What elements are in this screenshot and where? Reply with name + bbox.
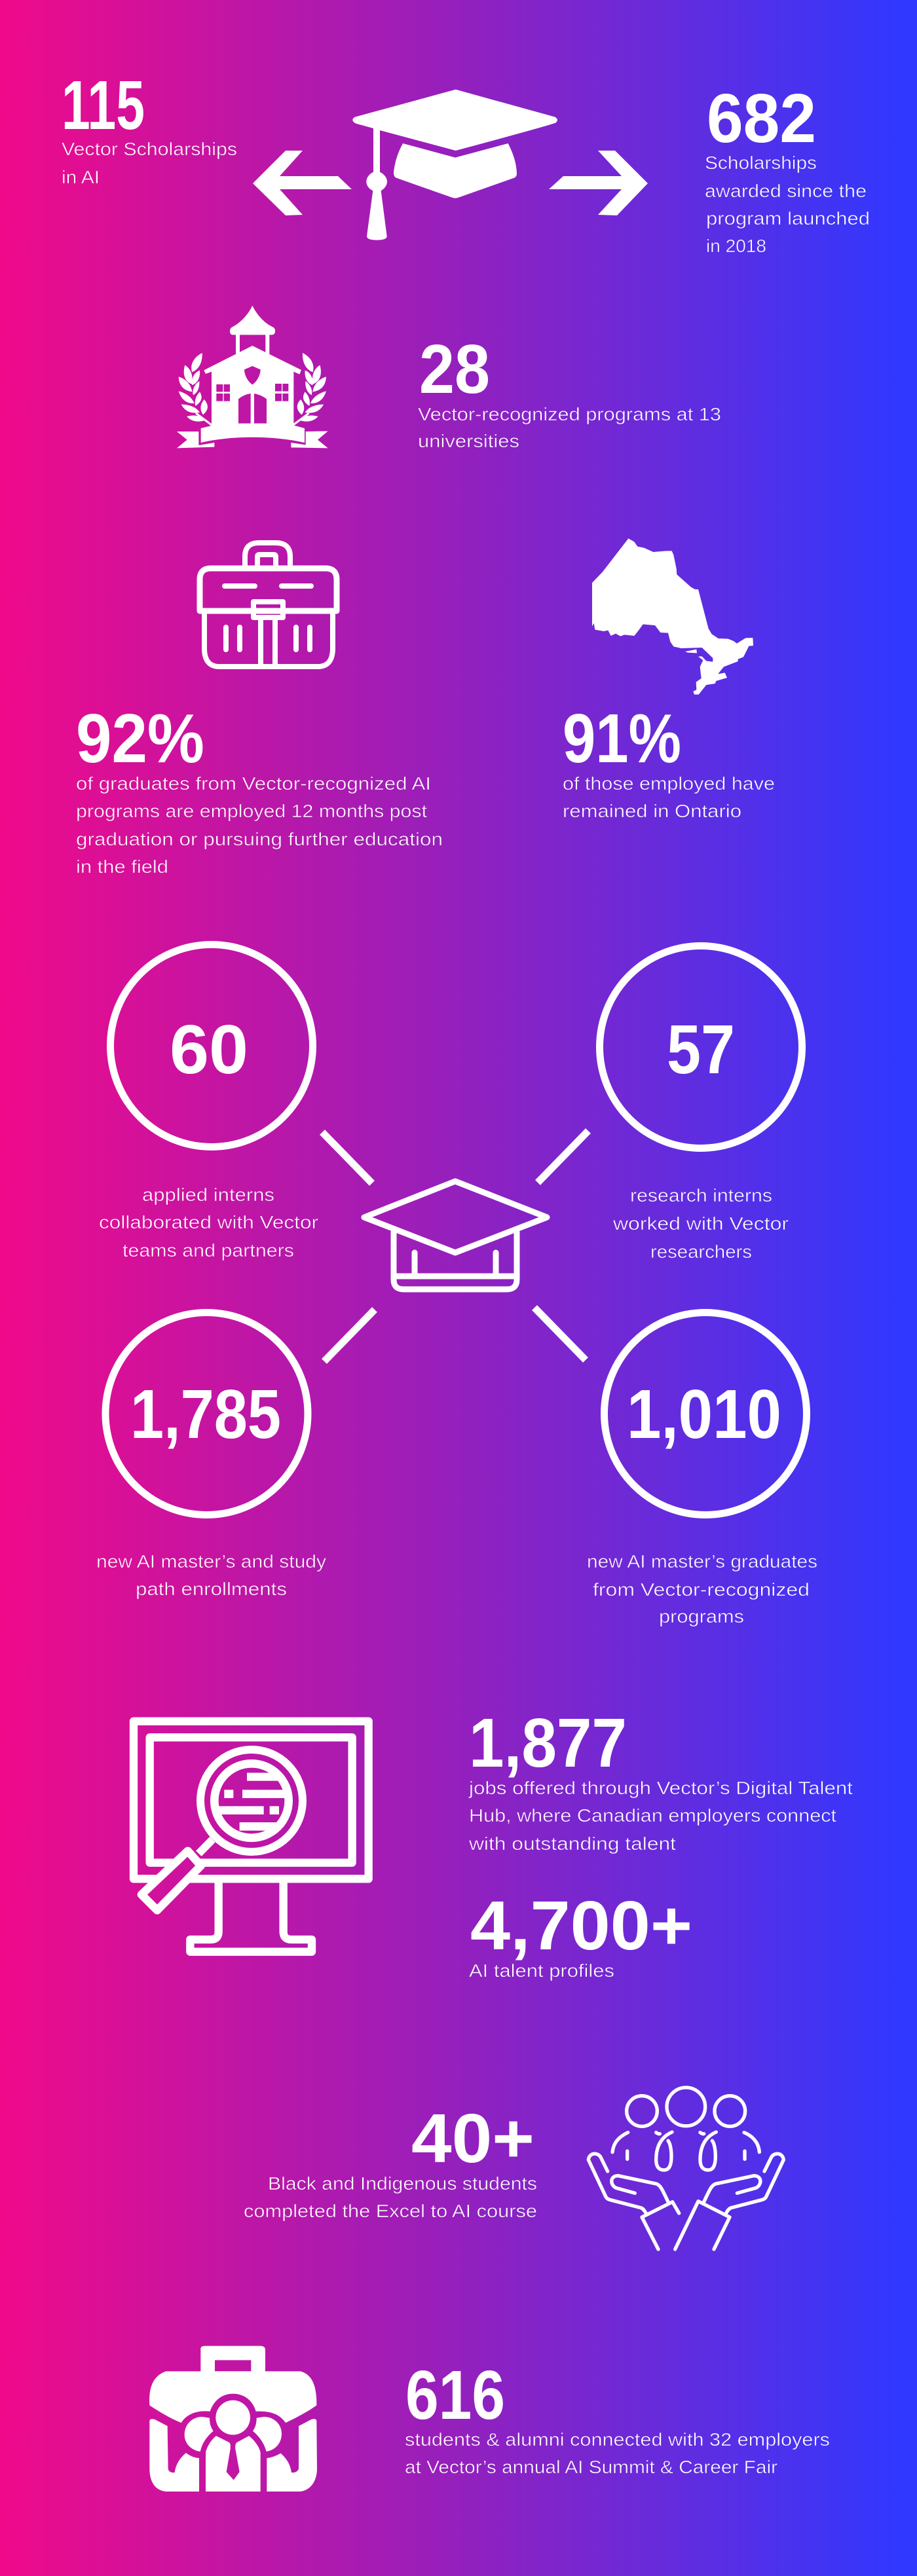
description: graduation or pursuing further education xyxy=(76,829,443,849)
description: programs are employed 12 months post xyxy=(76,801,427,821)
icon: hands holding people xyxy=(588,2088,783,2249)
caption: research interns: worked with Vector xyxy=(612,1213,789,1234)
description xyxy=(468,1778,853,1854)
number: 91% xyxy=(563,700,681,777)
clasp xyxy=(253,602,283,617)
description: Black and Indigenous students xyxy=(268,2173,537,2194)
icon: graduation cap with arrows xyxy=(253,90,648,240)
circle stat: 57: 57 xyxy=(667,1011,735,1088)
details xyxy=(225,586,311,650)
description: program launched xyxy=(706,208,870,229)
stat: 92% employed xyxy=(76,700,443,877)
bag top xyxy=(149,2371,316,2423)
data lines in lens xyxy=(219,1773,284,1831)
caption: research interns xyxy=(612,1185,789,1262)
stat: 40+ students xyxy=(244,2100,537,2221)
description xyxy=(244,2173,537,2221)
bodies xyxy=(612,2132,759,2170)
stat: 115 scholarships xyxy=(62,67,237,187)
stat: 91% remained in Ontario xyxy=(563,700,775,821)
description: Vector-recognized programs at 13 xyxy=(418,404,721,424)
case body xyxy=(204,611,333,667)
description: with outstanding talent xyxy=(468,1833,676,1854)
number: 92% xyxy=(76,700,204,777)
monitor frame xyxy=(134,1721,369,1879)
panel: interns and graduates xyxy=(96,944,817,1627)
number: 115 xyxy=(62,67,145,144)
description xyxy=(405,2429,830,2477)
description: remained in Ontario xyxy=(563,801,741,821)
right arrow xyxy=(549,151,648,215)
lens xyxy=(200,1750,303,1852)
circle stat: 1,785 xyxy=(105,1312,308,1515)
board xyxy=(352,90,557,151)
description: in 2018 xyxy=(706,236,766,256)
description: at Vector’s annual AI Summit & Career Fair xyxy=(405,2457,777,2477)
caption: applied interns xyxy=(99,1185,318,1260)
handle xyxy=(245,543,290,568)
caption: applied interns: collaborated with Vector xyxy=(99,1212,318,1232)
description xyxy=(76,773,443,877)
left laurel xyxy=(179,353,212,425)
caption: research interns: researchers xyxy=(650,1242,752,1262)
strap xyxy=(261,617,275,667)
description: universities xyxy=(418,431,519,451)
left arrow xyxy=(253,151,352,215)
description: Vector Scholarships xyxy=(62,139,237,159)
stat: 28 programs xyxy=(418,331,721,451)
circle stat: 1,010: 1,010 xyxy=(627,1376,781,1453)
description: students & alumni connected with 32 employers xyxy=(405,2429,830,2450)
description xyxy=(418,404,721,451)
description: awarded since the xyxy=(705,181,867,201)
circle stat: 1,785: 1,785 xyxy=(130,1376,281,1453)
description xyxy=(62,139,237,187)
bag handle xyxy=(200,2346,265,2372)
description: completed the Excel to AI course xyxy=(244,2201,537,2221)
stand xyxy=(190,1883,312,1952)
cap body xyxy=(394,143,517,198)
stat: 616 students and alumni xyxy=(405,2357,830,2477)
description: of graduates from Vector-recognized AI xyxy=(76,773,431,794)
heads xyxy=(627,2088,745,2126)
ribbon xyxy=(177,426,328,448)
tassel xyxy=(366,128,387,240)
right laurel xyxy=(293,353,326,425)
caption: applied interns: teams and partners xyxy=(122,1240,294,1260)
handle interior xyxy=(141,1851,201,1910)
stat: 4,700+ profiles xyxy=(469,1887,692,1981)
description: AI talent profiles xyxy=(469,1960,614,1981)
lid xyxy=(200,568,337,611)
number: 28 xyxy=(419,331,490,408)
right hand xyxy=(675,2154,783,2249)
icon: central graduation cap xyxy=(364,1181,547,1289)
number: 616 xyxy=(405,2357,505,2434)
number: 682 xyxy=(707,80,816,157)
description: in the field xyxy=(76,856,168,877)
icon: school with laurels xyxy=(177,306,328,448)
icon: Ontario map xyxy=(592,538,753,695)
description: jobs offered through Vector’s Digital Talent xyxy=(468,1778,853,1798)
cupola xyxy=(230,306,275,354)
circle stat: 60 xyxy=(110,944,313,1147)
description: Hub, where Canadian employers connect xyxy=(469,1805,836,1826)
school building xyxy=(204,346,301,427)
number: 40+ xyxy=(411,2100,534,2177)
stat: 682 scholarships xyxy=(705,80,870,256)
people xyxy=(185,2401,282,2492)
circle stat: 57 xyxy=(600,946,802,1149)
caption: graduates: from Vector-recognized xyxy=(593,1579,810,1600)
caption: graduates: new AI master’s graduates xyxy=(587,1551,817,1572)
number: 4,700+ xyxy=(470,1887,692,1964)
description: Scholarships xyxy=(705,153,817,173)
description xyxy=(705,153,870,256)
caption: enrollments: new AI master’s and study xyxy=(96,1551,326,1572)
bag lower left xyxy=(149,2419,199,2492)
description xyxy=(563,773,775,821)
circle stat: 1,010 xyxy=(604,1312,807,1515)
neck xyxy=(198,1839,212,1854)
stat: 1,877 jobs xyxy=(468,1704,853,1854)
icon: briefcase outline xyxy=(200,543,337,667)
description: in AI xyxy=(62,167,100,187)
caption: research interns: research interns xyxy=(630,1185,772,1205)
icon: briefcase with people xyxy=(149,2346,317,2492)
screen frame xyxy=(150,1737,352,1863)
caption: enrollments xyxy=(96,1551,326,1599)
caption: enrollments: path enrollments xyxy=(136,1579,287,1599)
handle outline xyxy=(141,1851,201,1910)
caption: graduates xyxy=(587,1551,817,1627)
circle stat: 60: 60 xyxy=(170,1011,248,1088)
icon: monitor with magnifying glass xyxy=(134,1721,369,1952)
caption: graduates: programs xyxy=(659,1606,744,1627)
left hand xyxy=(588,2154,679,2249)
description: of those employed have xyxy=(563,773,775,794)
caption: applied interns: applied interns xyxy=(142,1185,274,1205)
number: 1,877 xyxy=(469,1704,627,1782)
connector lines xyxy=(322,1131,588,1361)
bag lower right xyxy=(267,2419,317,2492)
